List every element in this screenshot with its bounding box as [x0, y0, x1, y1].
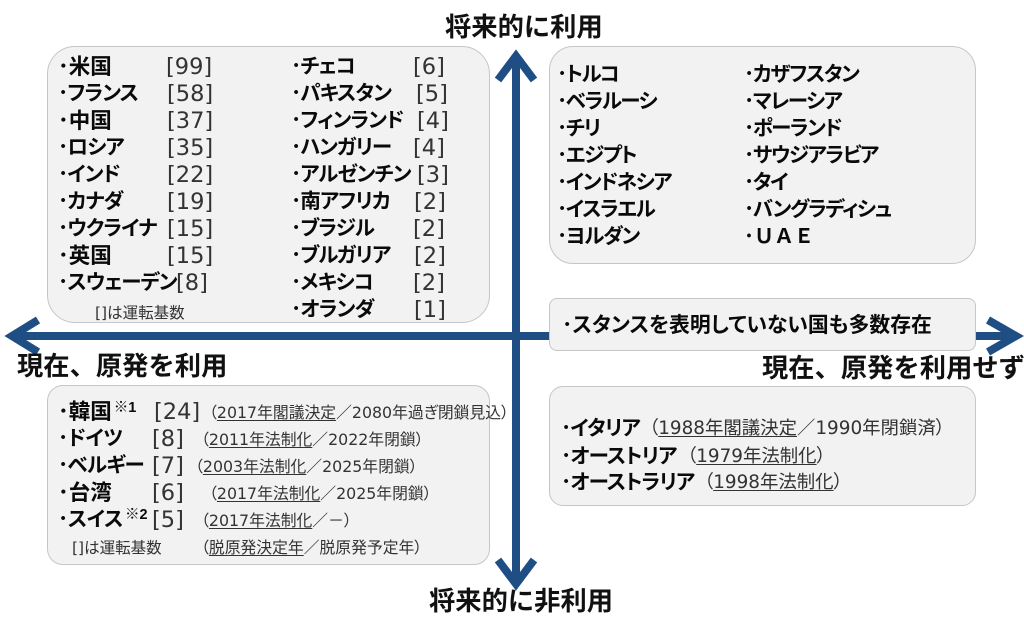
panel: currently using, no future use: （脱原発決定年／脱原発予定年） [201, 538, 422, 557]
panel: currently using, future use: [5] [416, 81, 448, 107]
panel: not currently using, no future use: ･イタリア [561, 417, 640, 440]
panel: not currently using, no future use: （1998年法制化） [704, 472, 843, 493]
panel: currently using, future use: [19] [167, 189, 213, 215]
panel: not currently using, future use: ･エジプト [557, 144, 636, 167]
panel: currently using, future use: ･オランダ [291, 298, 374, 321]
panel: not currently using, future use: ･イスラエル [557, 198, 654, 221]
panel: currently using, no future use: ･ドイツ [58, 427, 123, 450]
panel: currently using, future use: [22] [167, 162, 213, 188]
panel: not currently using, future use: ･ポーランド [744, 117, 841, 140]
panel: no stated stance [549, 298, 976, 351]
panel: currently using, future use: ･ハンガリー [291, 136, 391, 159]
panel: currently using, no future use: （2017年閣議決定／2080年過ぎ閉鎖見込） [209, 403, 509, 422]
panel: currently using, future use: []は運転基数 [95, 304, 185, 322]
panel: currently using, future use: [2] [413, 216, 445, 242]
panel: currently using, future use: ･インド [58, 163, 120, 186]
panel: not currently using, future use: ･バングラディシュ [744, 198, 891, 221]
panel: currently using, future use: [35] [167, 135, 213, 161]
panel: not currently using, future use: ･カザフスタン [744, 63, 859, 86]
panel: not currently using, future use: ･チリ [557, 117, 600, 140]
panel: currently using, no future use: （2003年法制化／2025年閉鎖） [195, 457, 418, 476]
axis label: left: 現在、原発を利用 [17, 344, 227, 383]
panel: currently using, future use: [2] [413, 270, 445, 296]
axis label: right: 現在、原発を利用せず [762, 346, 1024, 385]
panel: currently using, future use: ･英国 [58, 244, 112, 268]
panel: currently using, future use: ･カナダ [58, 190, 123, 213]
panel: currently using, future use: [15] [167, 243, 213, 269]
panel: currently using, no future use: （2017年法制化／－） [201, 511, 352, 530]
panel: not currently using, no future use: （1979年法制化） [687, 446, 826, 467]
panel: currently using, future use: ･米国 [58, 55, 112, 79]
panel: currently using, future use: ･アルゼンチン [291, 163, 411, 186]
panel: not currently using, future use: ･インドネシア [557, 171, 671, 194]
panel: currently using, future use: [2] [414, 243, 446, 269]
panel: currently using, future use: [37] [167, 108, 213, 134]
panel: currently using, no future use: （2017年法制化／2025年閉鎖） [209, 484, 432, 503]
panel: currently using, no future use: ･韓国※1 [58, 400, 136, 424]
panel: currently using, no future use: [5] [152, 507, 184, 533]
panel: currently using, no future use: （2011年法制化／2022年閉鎖） [201, 430, 424, 449]
panel: currently using, future use: [15] [167, 216, 213, 242]
panel: currently using, future use: [1] [414, 297, 446, 323]
panel: currently using, future use: ･フランス [58, 82, 138, 105]
panel: currently using, future use: [6] [413, 54, 445, 80]
panel: not currently using, future use: ･サウジアラビア [744, 144, 878, 167]
panel: currently using, no future use: ･ベルギー [58, 454, 144, 477]
panel: currently using, future use: [2] [414, 189, 446, 215]
panel: currently using, future use: ･ウクライナ [58, 217, 156, 240]
panel: currently using, no future use: [6] [152, 480, 184, 506]
panel: currently using, future use: ･フィンランド [291, 109, 403, 132]
panel: not currently using, no future use: ･オーストラリア [561, 471, 694, 494]
panel: not currently using, no future use: ･オーストリア [561, 445, 676, 468]
panel: currently using, no future use: ･台湾 [58, 481, 112, 505]
panel: not currently using, future use: ･ヨルダン [557, 225, 639, 248]
panel: currently using, no future use [47, 385, 490, 565]
panel: currently using, no future use: [8] [152, 426, 184, 452]
panel: currently using, future use: [4] [413, 135, 445, 161]
panel: not currently using, no future use [549, 386, 976, 506]
panel: currently using, future use: ･パキスタン [291, 82, 391, 105]
panel: not currently using, future use [549, 46, 976, 264]
panel: not currently using, future use: ･ベラルーシ [557, 90, 656, 113]
panel: currently using, future use: ･ブラジル [291, 217, 374, 240]
panel: not currently using, future use: ･ＵＡＥ [744, 226, 814, 248]
panel: currently using, future use: [99] [166, 54, 212, 80]
panel: not currently using, no future use: （1988年閣議決定／1990年閉鎖済） [649, 418, 945, 439]
panel: currently using, future use: ･メキシコ [291, 271, 373, 294]
panel: currently using, no future use: ･スイス※2 [58, 507, 148, 531]
panel: currently using, future use: [8] [176, 270, 208, 296]
panel: currently using, future use: [4] [417, 108, 449, 134]
panel: currently using, future use [47, 46, 490, 323]
panel: currently using, future use: [3] [417, 162, 449, 188]
panel: currently using, future use: ･ブルガリア [291, 244, 390, 267]
panel: currently using, future use: [58] [167, 81, 213, 107]
panel: currently using, no future use: [7] [152, 453, 184, 479]
axis label: top: 将来的に利用 [445, 5, 603, 44]
panel: currently using, future use: ･南アフリカ [291, 190, 390, 213]
panel: currently using, future use: ･チェコ [291, 55, 355, 78]
panel: currently using, no future use: [24] [154, 399, 200, 425]
panel: currently using, future use: ･中国 [58, 109, 112, 133]
panel: not currently using, future use: ･タイ [744, 171, 787, 194]
panel: currently using, future use: ･スウェーデン [58, 271, 177, 294]
panel: currently using, future use: ･ロシア [58, 136, 124, 159]
panel: no stated stance: ･スタンスを表明していない国も多数存在 [562, 314, 932, 337]
panel: not currently using, future use: ･トルコ [557, 63, 618, 86]
panel: currently using, no future use: []は運転基数 [72, 539, 162, 557]
axis label: bottom: 将来的に非利用 [429, 579, 613, 618]
panel: not currently using, future use: ･マレーシア [744, 90, 841, 113]
